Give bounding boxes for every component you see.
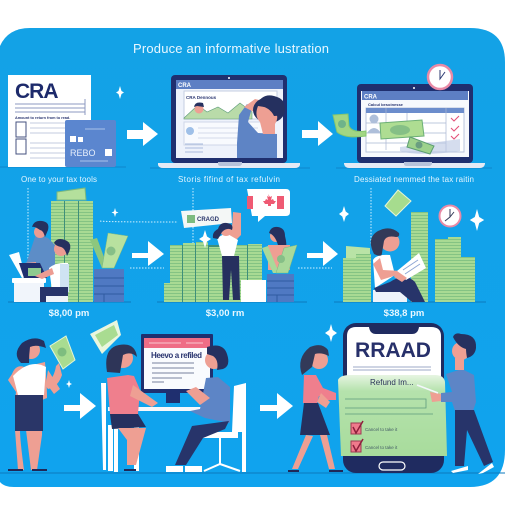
man with pen	[417, 333, 494, 474]
woman behind banknotes	[268, 227, 290, 270]
box with banknotes	[90, 233, 128, 302]
sparkle	[470, 209, 484, 231]
flying banknotes	[333, 114, 434, 154]
panel: woman with banknote	[8, 336, 75, 470]
speech bubble with flag	[247, 189, 290, 222]
panel: money stacks with two people	[8, 188, 131, 302]
banknote	[50, 336, 75, 369]
sparkle	[112, 208, 118, 217]
green form: Refund Im...	[370, 378, 414, 387]
man seated	[35, 239, 70, 302]
panel: step 1 tax documents	[0, 75, 126, 167]
CRA heading: CRA	[15, 80, 58, 103]
woman holding sign	[181, 208, 241, 300]
value 3: $38,8 pm	[384, 308, 424, 319]
arrow 6	[64, 393, 96, 419]
desk and chairs	[101, 383, 246, 472]
woman seated	[106, 344, 158, 470]
clock	[428, 65, 452, 89]
panel: two people at desk with monitor	[101, 334, 246, 472]
clock	[440, 206, 460, 226]
value 2: $3,00 rm	[206, 308, 244, 319]
panel: step 3 laptop: Calcul besoinesse	[368, 102, 404, 107]
sparkle	[325, 324, 337, 342]
floating banknote	[90, 320, 121, 354]
sparkle	[339, 206, 349, 222]
green form	[338, 367, 447, 456]
panel: step 2 laptop	[150, 75, 310, 168]
arrow 7	[260, 393, 293, 419]
panel: step 2 laptop: CRA Dennous	[186, 95, 217, 100]
caption 1: One to your tax tools	[21, 175, 97, 184]
arrow 2	[302, 121, 333, 146]
panel: woman reading with stacks	[334, 190, 486, 302]
arrow 1	[127, 122, 158, 146]
caption 3: Dessiated nemmed the tax raitin	[354, 175, 474, 184]
panel: step 3 laptop: CRA	[364, 94, 378, 100]
woman with phone	[288, 345, 343, 471]
man seated	[166, 346, 230, 472]
sparkle	[66, 380, 72, 388]
panel: step 2 laptop: CRA	[178, 83, 192, 89]
man standing	[24, 221, 55, 275]
panel: phone with refund form	[288, 323, 494, 474]
woman holding sign: CRAGD	[197, 217, 220, 223]
floating banknote	[385, 190, 411, 216]
small avatar	[194, 102, 204, 114]
banknote on top	[57, 188, 86, 200]
sparkle	[116, 86, 124, 99]
monitor	[141, 334, 213, 403]
value 1: $8,00 pm	[49, 308, 89, 319]
dotted connectors	[28, 188, 371, 268]
panel: step 3 laptop	[333, 65, 492, 168]
bottom ground line	[0, 472, 505, 474]
bank card: REBO	[70, 148, 96, 158]
person at screen	[237, 95, 285, 158]
green form: Cancel to take it	[365, 445, 398, 450]
phone heading: RRAAD	[355, 339, 431, 362]
woman reading	[371, 228, 426, 302]
green form: Cancel to take it	[365, 427, 398, 432]
sparkle	[199, 230, 211, 248]
arrow 4	[132, 241, 164, 266]
caption 2: Storis fifind of tax refulvin	[178, 175, 280, 184]
panel: step 1 tax documents: Amount to return from to read.	[15, 116, 70, 120]
title: Produce an informative lustration	[133, 41, 329, 56]
box with banknotes	[262, 245, 297, 302]
laptop	[9, 252, 27, 278]
arrow 5	[307, 241, 338, 266]
monitor: Heevo a refiled	[151, 351, 202, 360]
panel: money stacks with flag	[157, 189, 307, 302]
